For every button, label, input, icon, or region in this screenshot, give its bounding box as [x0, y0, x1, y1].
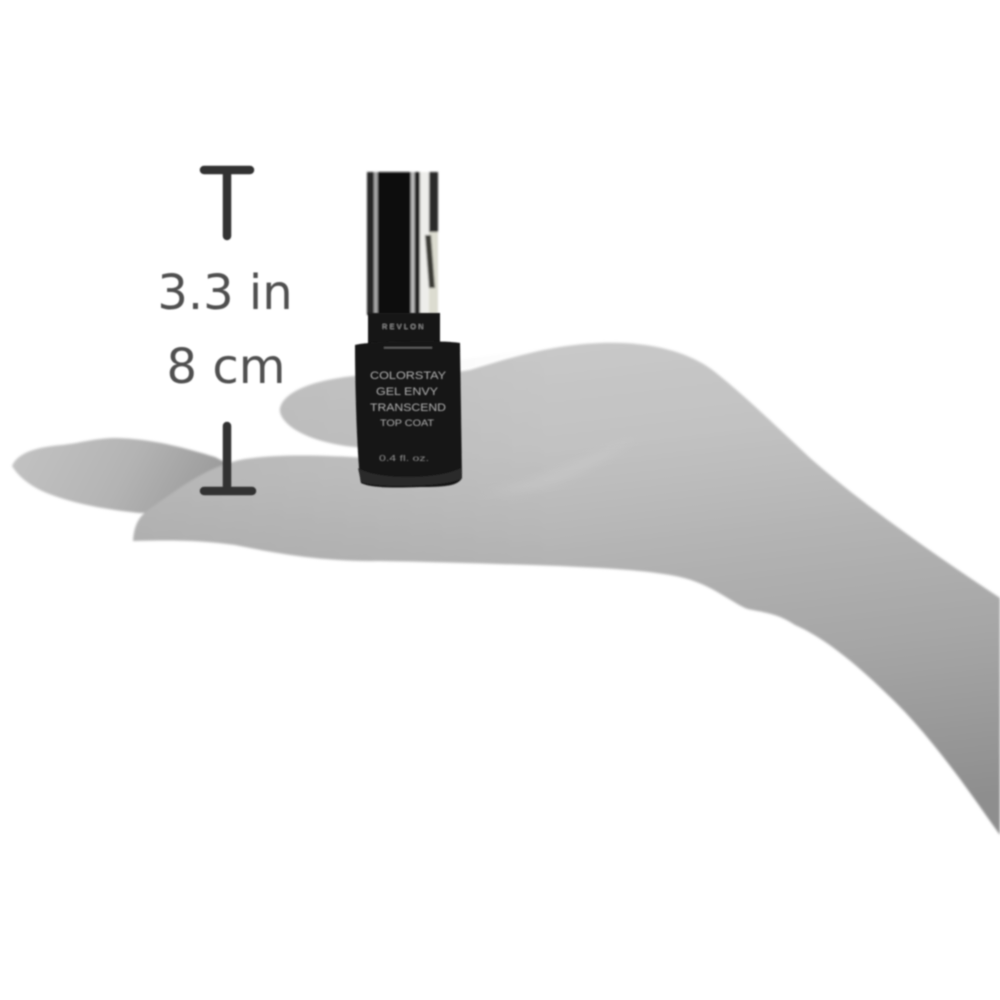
bottle label: [370, 370, 447, 463]
left side shading: [133, 345, 560, 566]
measure top marker: [204, 170, 250, 236]
bottle label: TRANSCEND: [370, 402, 446, 414]
bottle collar: [368, 313, 440, 346]
bottle cap: [367, 172, 438, 315]
nail polish bottle: [355, 172, 462, 488]
measure label inches: 3.3 in: [157, 265, 293, 321]
palm, thumb and arm: [133, 343, 1000, 835]
bottle collar: REVLON: [382, 324, 426, 331]
measure bottom marker: [204, 426, 254, 491]
bottle label: TOP COAT: [380, 418, 435, 428]
bottle label: GEL ENVY: [376, 386, 439, 398]
index finger: [12, 438, 240, 513]
palm highlight: [480, 436, 640, 493]
measure label centimetres: 8 cm: [167, 339, 285, 395]
bottle label: COLORSTAY: [370, 370, 447, 382]
height measurement: [157, 170, 293, 491]
cap glint: [425, 235, 435, 288]
hand silhouette: [12, 343, 1000, 835]
bottle label: 0.4 fl. oz.: [379, 454, 429, 463]
bottle body: [355, 341, 462, 488]
